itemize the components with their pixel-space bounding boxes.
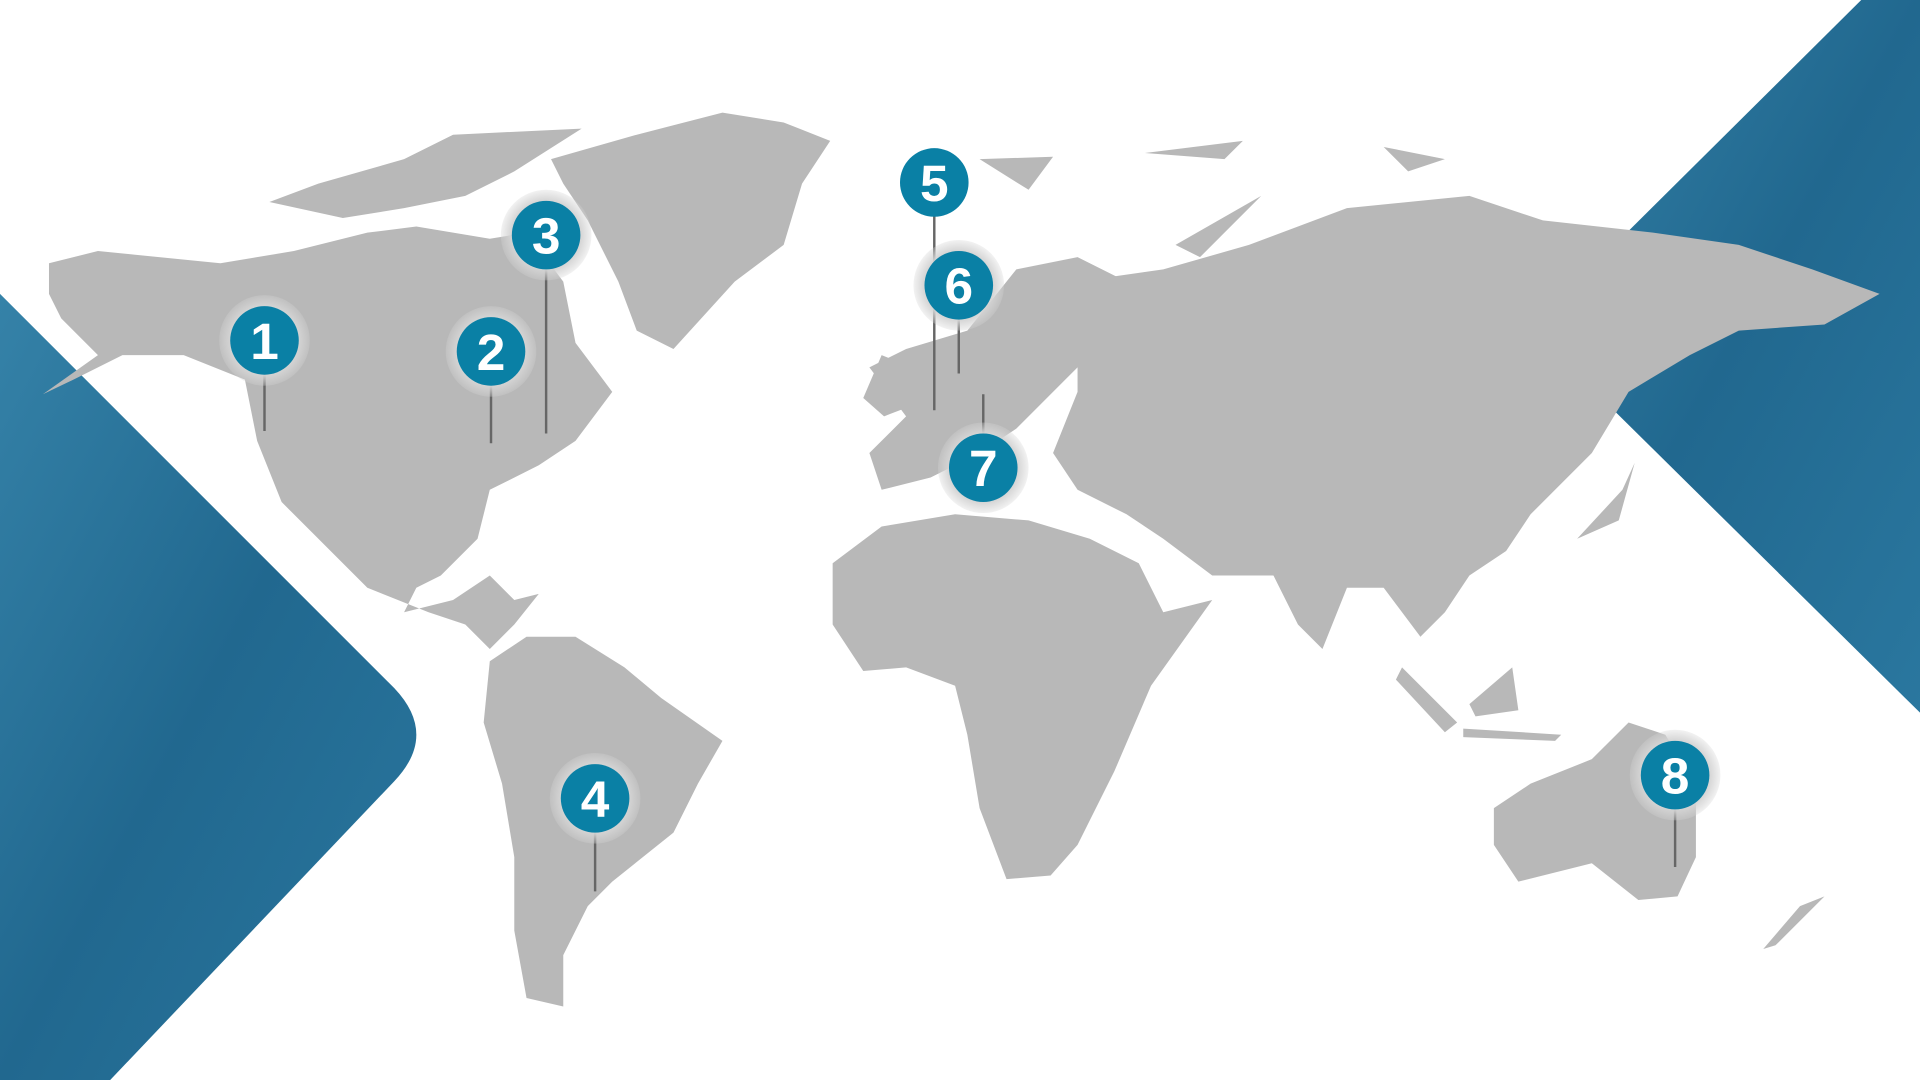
pin 4 — [550, 753, 640, 891]
pin 2: 2 — [477, 323, 505, 381]
pin 6: 6 — [944, 257, 973, 315]
pin 7 — [938, 394, 1029, 513]
pin 3 — [501, 190, 591, 433]
pin 8: 8 — [1661, 746, 1689, 804]
australia — [1494, 722, 1696, 900]
north america — [43, 227, 612, 649]
new zealand — [1763, 896, 1824, 949]
arctic bits — [980, 141, 1445, 257]
africa — [833, 514, 1212, 879]
arctic islands — [269, 129, 582, 218]
south america — [484, 637, 722, 1007]
pin 1 — [219, 295, 310, 431]
pin 8 — [1630, 730, 1720, 867]
pin 7: 7 — [969, 439, 998, 497]
ocean panel: right — [1531, 0, 1920, 713]
japan — [1577, 463, 1635, 539]
pin 5 — [900, 148, 969, 410]
europe — [869, 257, 1127, 490]
world map — [43, 113, 1880, 1007]
ocean panel: left — [0, 294, 416, 1080]
pin 2 — [446, 306, 536, 443]
asia — [1053, 196, 1880, 649]
pin 6 — [913, 240, 1004, 373]
pin 3: 3 — [532, 206, 560, 264]
greenland — [551, 113, 830, 349]
britain — [863, 355, 916, 416]
indonesia — [1396, 667, 1561, 741]
pins — [219, 148, 1720, 891]
pin 5: 5 — [920, 154, 949, 212]
pin 1: 1 — [250, 312, 279, 370]
pin 4: 4 — [581, 770, 610, 828]
